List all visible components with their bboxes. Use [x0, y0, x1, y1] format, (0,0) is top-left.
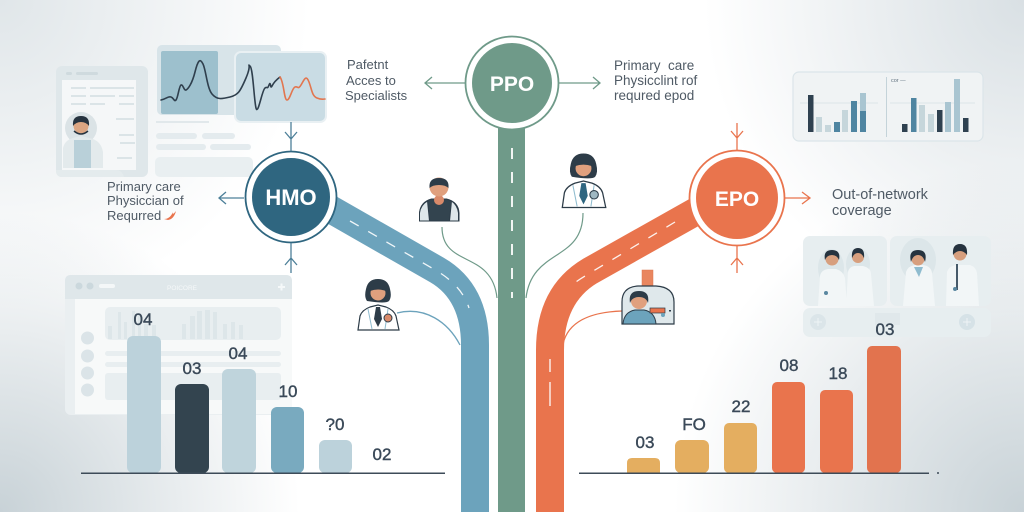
text: HMO label: Primary care [107, 179, 181, 194]
panel: right bar chart card: cor — [891, 78, 906, 84]
text: HMO label: Requrred [107, 208, 161, 223]
panel: doctors carousel controls [803, 308, 991, 337]
panel: browser window behind left chart: POICORE [167, 285, 198, 292]
text: patient access label: Acces to [346, 73, 396, 88]
bar chart: EPO: 08 [780, 356, 798, 375]
arrow: EPO bottom [731, 246, 743, 273]
bar chart: EPO: 22 [732, 397, 750, 416]
line chart: vitals trace [161, 61, 325, 110]
text: PPO primary care label [614, 58, 698, 103]
bar chart: HMO: 03 [183, 359, 201, 378]
node: PPO [466, 36, 558, 130]
node: PPO: PPO [490, 73, 534, 96]
bar chart: HMO [81, 310, 445, 474]
connector: doctor to PPO road [526, 213, 583, 298]
text: patient access label: Specialists [345, 88, 408, 103]
arrow: PPO left [425, 77, 465, 89]
icon: provider at booth [622, 270, 674, 324]
arrow: EPO top [731, 123, 743, 150]
text: PPO primary care label: Primary care [614, 58, 694, 73]
node: HMO [246, 152, 336, 242]
text: out-of-network coverage: Out-of-network [832, 187, 929, 203]
arrow: HMO left [219, 192, 244, 204]
bar chart: HMO: ?0 [326, 415, 344, 434]
text: patient access label: Pafetnt [347, 57, 389, 72]
bar chart: EPO: 03 [876, 320, 894, 339]
road: PPO green [498, 125, 525, 512]
road: HMO blue [325, 206, 475, 512]
icon: doctor near HMO road [358, 279, 399, 330]
connector: patient to PPO road [442, 227, 497, 298]
panel: right bar chart card [793, 72, 983, 141]
node: HMO: HMO [265, 185, 317, 210]
node: EPO [690, 150, 784, 246]
panel: browser window behind left chart [65, 275, 292, 415]
arrow: HMO bottom [285, 243, 297, 273]
text: PPO primary care label: Physicclint rof [614, 73, 698, 88]
bar chart: EPO: 03 [636, 433, 654, 452]
panel: doctors photo left [803, 236, 887, 306]
bar chart: HMO: 04 [229, 344, 247, 363]
bar chart: EPO [579, 320, 939, 474]
bar chart: EPO: 18 [829, 364, 847, 383]
bar chart: EPO: FO [682, 415, 706, 434]
icon: patient [420, 178, 459, 221]
panel: patient record text lines [155, 121, 253, 177]
text: HMO label [107, 179, 184, 223]
road: EPO orange [550, 208, 702, 512]
panel: front chart card [235, 52, 326, 122]
panel: back chart card [157, 45, 281, 115]
arrow: EPO right [785, 192, 810, 204]
text: PPO primary care label: requred epod [614, 88, 694, 103]
connector: doctor to HMO road [397, 311, 460, 345]
panel: doctors photo right [890, 236, 991, 306]
text: HMO label: Physiccian of [107, 193, 184, 208]
panel: patient record card [56, 66, 148, 177]
bar chart: HMO: 04 [134, 310, 152, 329]
text: out-of-network coverage: coverage [832, 203, 892, 219]
node: EPO: EPO [715, 188, 759, 211]
bar chart: HMO: 02 [373, 445, 391, 464]
arrow: HMO top [285, 122, 297, 151]
text: patient access label [345, 57, 408, 103]
connector: provider to EPO road [563, 311, 622, 344]
bar chart: HMO: 10 [279, 382, 297, 401]
text: out-of-network coverage [832, 187, 929, 219]
arrow: PPO right [559, 77, 600, 89]
icon: doctor near PPO road [562, 153, 606, 208]
